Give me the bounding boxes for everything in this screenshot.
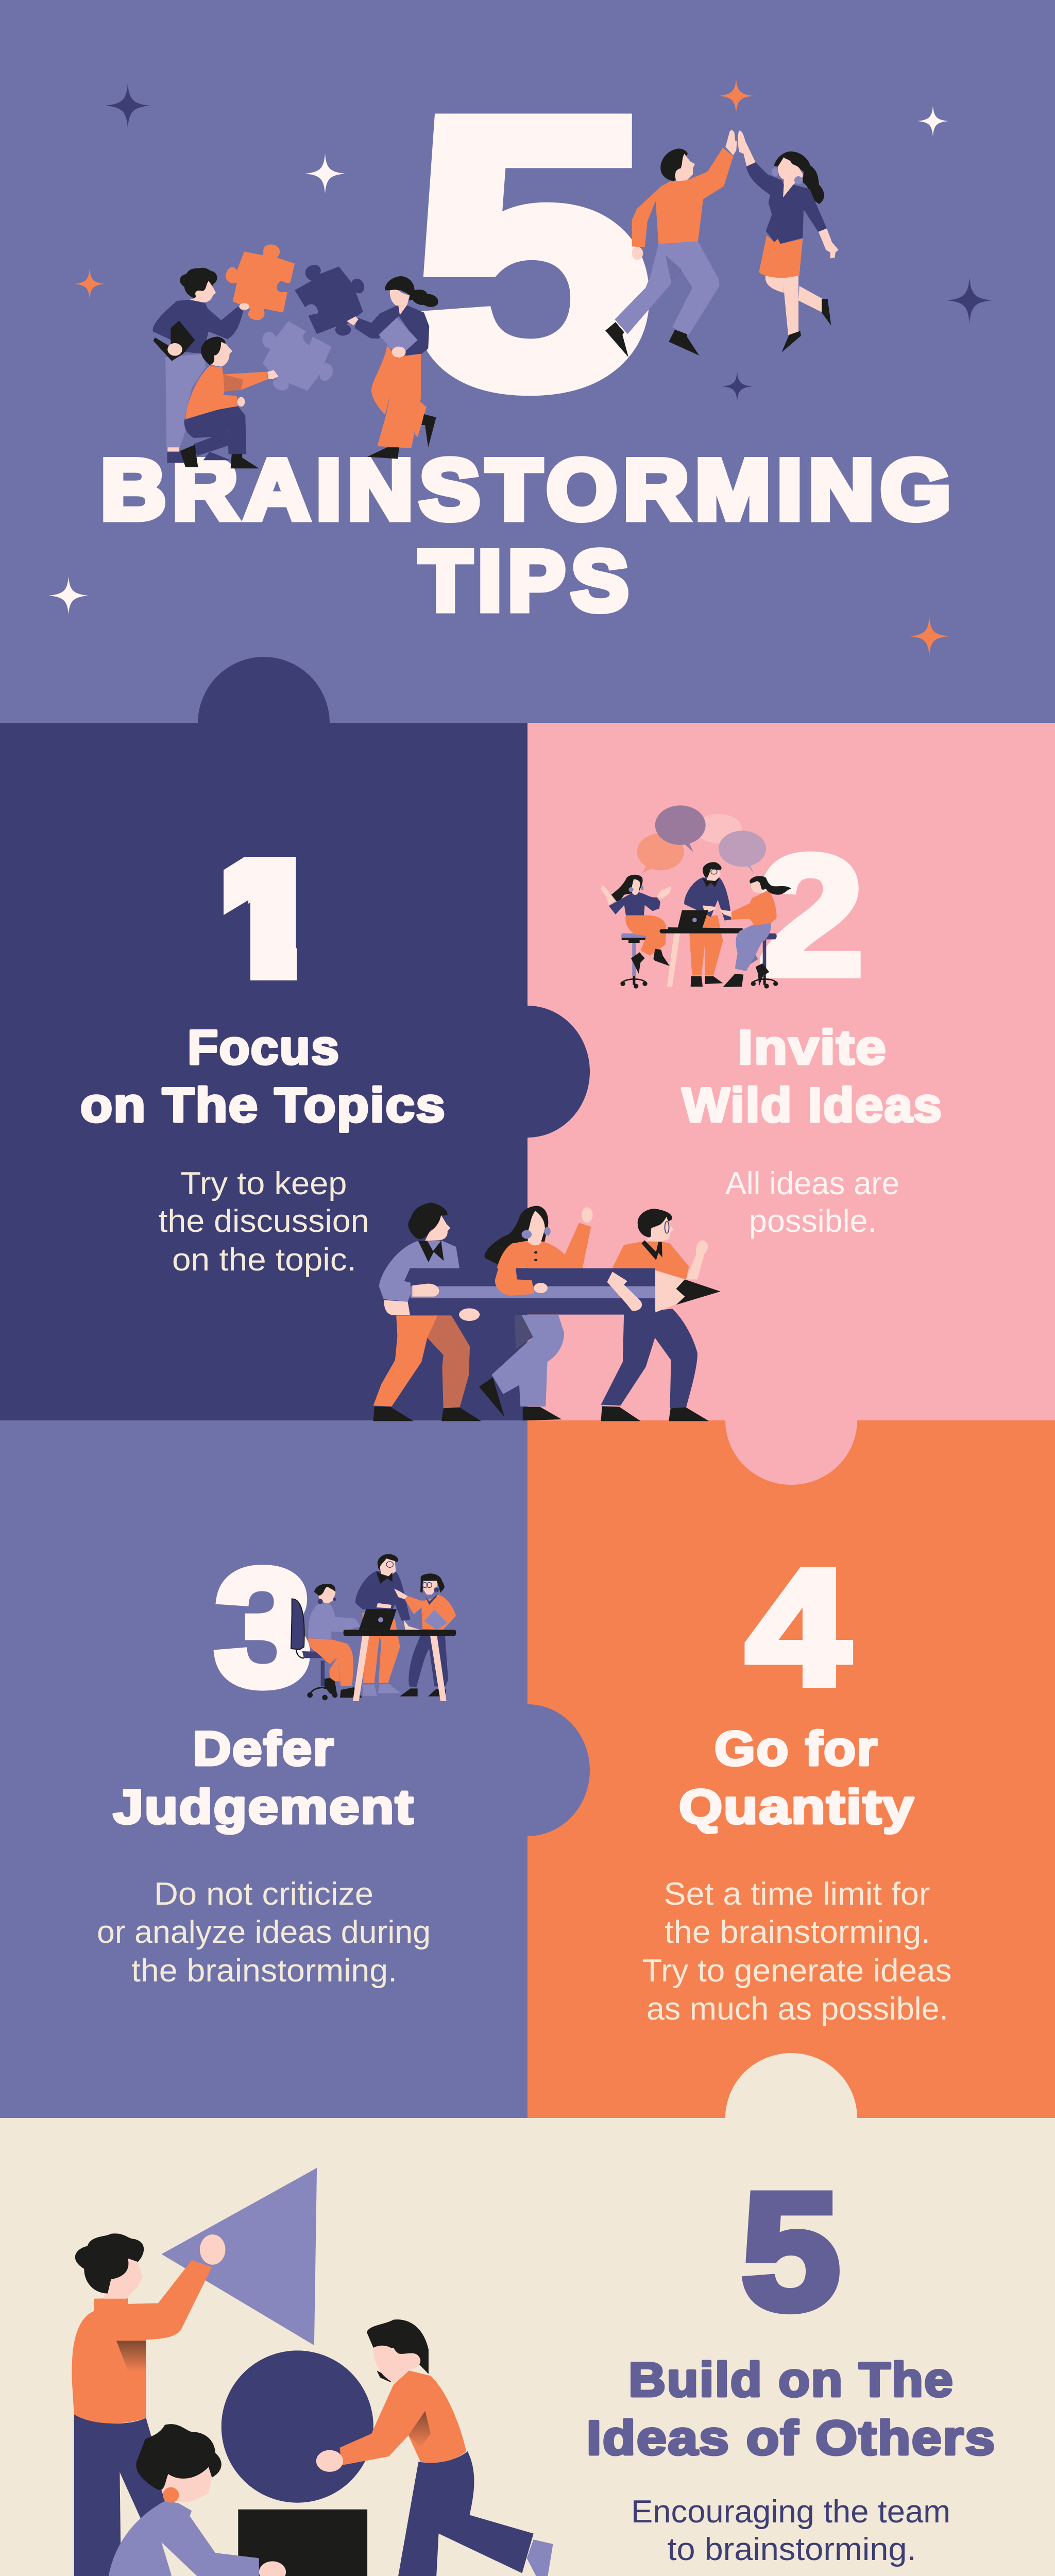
heading: Quantity [679, 1780, 915, 1834]
person two torso [485, 1206, 592, 1296]
puzzle tab top [198, 657, 330, 790]
shape: square [238, 2510, 367, 2576]
person crouching at square [108, 2424, 286, 2576]
desk [344, 1630, 456, 1701]
number 5: 5 [741, 2159, 840, 2344]
illustration: three people seated at desk with laptop [291, 1554, 456, 1701]
title [101, 442, 957, 628]
woman on stool [601, 875, 671, 989]
heading: Go for [714, 1721, 878, 1775]
heading: Ideas of Others [586, 2411, 996, 2465]
body text: Try to keep [180, 1166, 347, 1201]
man jumping [605, 130, 737, 357]
person one legs [373, 1315, 481, 1421]
icon: lilac puzzle piece [262, 321, 333, 391]
panel: tip 2 invite wild ideas [528, 723, 1055, 1485]
heading [679, 1721, 915, 1834]
body text: or analyze ideas during [97, 1914, 431, 1950]
standing man [355, 1554, 421, 1696]
person crouching [180, 336, 279, 468]
body text [725, 1166, 899, 1239]
panel: tip 5 build on the ideas of others [0, 2053, 1055, 2576]
table top [659, 927, 743, 934]
body text: Set a time limit for [663, 1876, 930, 1912]
heading: Judgement [113, 1780, 414, 1834]
title: BRAINSTORMING [101, 442, 957, 537]
icon: orange puzzle piece [226, 245, 295, 320]
body text: on the topic. [172, 1242, 356, 1278]
hands and sleeves over pencil [412, 1267, 642, 1321]
body text [631, 2494, 950, 2567]
heading: Invite [738, 1020, 887, 1074]
big number 5: 5 [411, 39, 653, 466]
body text: as much as possible. [646, 1991, 948, 2027]
speech bubbles [637, 805, 766, 874]
icon: navy puzzle piece [295, 265, 364, 336]
body text [159, 1166, 369, 1278]
person two legs [479, 1315, 564, 1420]
person three torso [611, 1209, 689, 1281]
body text: the brainstorming. [131, 1953, 397, 1989]
number 3: 3 [214, 1535, 312, 1720]
man standing with laptop [684, 862, 731, 987]
woman with folder [394, 1573, 456, 1697]
heading [113, 1721, 414, 1834]
puzzle tab [725, 2053, 857, 2183]
number 4: 4 [746, 1536, 850, 1719]
panel: tip 1 focus on the topics [0, 657, 590, 1420]
body text: Encouraging the team [631, 2494, 950, 2530]
heading: Defer [193, 1721, 335, 1775]
heading [586, 2352, 996, 2465]
person reaching up to triangle [72, 2233, 226, 2576]
heading: on The Topics [80, 1078, 446, 1132]
illustration: three people carrying a giant pencil [373, 1202, 721, 1421]
body text: Do not criticize [154, 1876, 373, 1912]
puzzle tab right [465, 1006, 590, 1138]
heading: Wild Ideas [682, 1078, 943, 1132]
office chair [291, 1599, 337, 1700]
person three legs and arm [601, 1240, 709, 1421]
body text [642, 1876, 952, 2027]
body text: possible. [749, 1204, 877, 1239]
body text: the discussion [159, 1204, 369, 1239]
person pushing circle [316, 2319, 553, 2576]
body text: to brainstorming. [668, 2532, 916, 2567]
title: TIPS [419, 533, 635, 628]
laptop [677, 910, 708, 929]
shape: triangle [161, 2168, 317, 2345]
body text: All ideas are [725, 1166, 899, 1201]
table leg [667, 934, 680, 987]
body text [97, 1876, 431, 1989]
illustration: team assembling puzzle pieces [152, 245, 438, 468]
woman jumping [738, 130, 839, 352]
woman holding puzzle piece [347, 276, 438, 459]
panel: tip 4 go for quantity [528, 1420, 1055, 2118]
shape: circle [222, 2350, 373, 2503]
heading: Build on The [628, 2352, 954, 2406]
puzzle tab [465, 1704, 590, 1836]
panel: hero header [0, 0, 1055, 723]
number 2: 2 [758, 820, 863, 1010]
laptop [359, 1609, 397, 1630]
person one torso [379, 1202, 460, 1315]
puzzle tab [725, 1356, 857, 1485]
heading [682, 1020, 943, 1132]
body text: Try to generate ideas [642, 1953, 952, 1989]
body text: the brainstorming. [665, 1914, 930, 1950]
illustration: team stacking geometric shapes [72, 2168, 553, 2576]
seated person [308, 1584, 362, 1698]
giant pencil [411, 1268, 721, 1315]
heading [80, 1020, 446, 1132]
heading: Focus [188, 1020, 340, 1074]
decorative sparkle stars [48, 78, 992, 656]
illustration: two people high-fiving [605, 130, 839, 357]
panel: tip 3 defer judgement [0, 1420, 590, 2118]
illustration: three people at meeting table with speech bubbles [601, 805, 791, 989]
woman with ponytail [719, 876, 791, 989]
person standing with folder [152, 268, 249, 463]
number 1: 1 [219, 823, 317, 1013]
